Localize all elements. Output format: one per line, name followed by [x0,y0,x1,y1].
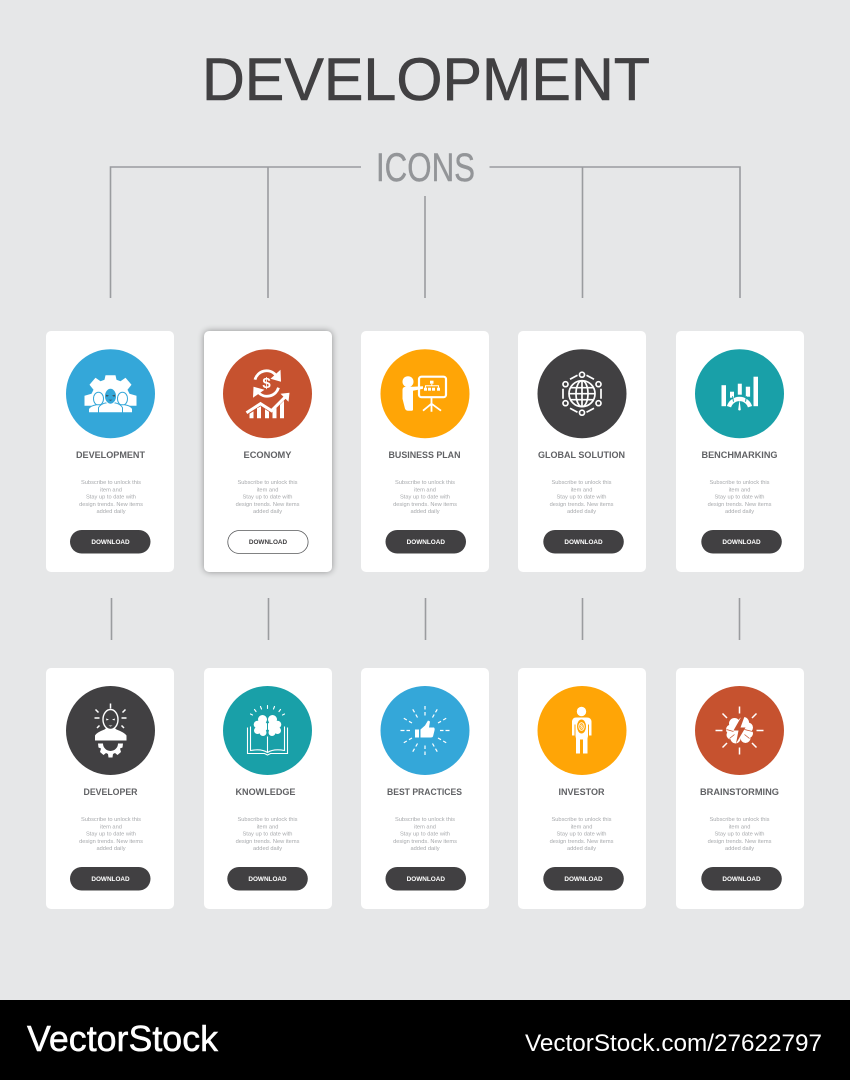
description: Stay up to date with [715,495,764,501]
description: Stay up to date with [243,495,292,501]
title: DEVELOPMENT [202,46,650,113]
description: Subscribe to unlock this [395,480,455,486]
description: item and [571,487,592,493]
icon: investor [538,686,626,775]
description [708,817,772,852]
description: Stay up to date with [86,495,136,501]
button [543,867,624,890]
panel: developer [46,668,174,909]
button [701,530,782,554]
panel: global solution [518,331,646,572]
button [227,867,308,890]
description: item and [414,487,436,493]
button: DOWNLOAD [407,876,445,883]
description: Subscribe to unlock this [237,480,298,486]
description: item and [257,824,278,830]
description: item and [729,487,750,493]
description: Stay up to date with [400,832,450,838]
description: item and [571,824,592,830]
description: item and [100,824,122,830]
icon: brainstorming [695,686,784,775]
description: design trends. New items [79,502,143,508]
description: added daily [96,846,126,852]
description [393,480,457,515]
description: Stay up to date with [557,495,606,501]
connector lines: middle [112,598,740,640]
button [386,530,466,554]
icon: development [66,349,155,438]
description [79,817,143,852]
description: Subscribe to unlock this [81,480,141,486]
panel: knowledge [204,668,332,909]
button: DOWNLOAD [249,539,288,546]
button [543,530,624,554]
heading: KNOWLEDGE [236,787,296,798]
heading: BEST PRACTICES [387,787,463,798]
button [70,530,150,554]
panel: investor [518,668,646,909]
button: DOWNLOAD [564,539,603,546]
button: DOWNLOAD [91,539,130,546]
description [393,817,457,852]
panel: economy [204,331,332,572]
description: added daily [96,509,126,515]
button: DOWNLOAD [407,539,445,546]
description: Subscribe to unlock this [709,480,770,486]
subtitle: ICONS: ICONS [376,146,475,190]
description: design trends. New items [550,839,614,845]
description [550,480,614,515]
icon: best practices [380,686,470,775]
button [228,530,308,554]
description [236,480,300,515]
footer logo: VectorStock [27,1018,219,1059]
description: design trends. New items [79,839,143,845]
button: DOWNLOAD [248,876,287,883]
button: DOWNLOAD [564,876,603,883]
icon: economy: $ [262,375,271,392]
heading: BRAINSTORMING [700,787,779,798]
panel: development [46,331,174,572]
description [550,817,614,852]
icon: benchmarking [695,349,784,438]
description: Stay up to date with [86,832,136,838]
button [70,867,150,890]
description: item and [414,824,436,830]
description: Subscribe to unlock this [551,817,612,823]
heading: BUSINESS PLAN [388,450,461,461]
icon: investor: $ [580,724,583,730]
description: Subscribe to unlock this [395,817,455,823]
description [79,480,143,515]
description: design trends. New items [393,839,457,845]
description: design trends. New items [236,502,300,508]
description: design trends. New items [708,502,772,508]
panel: brainstorming [676,668,804,909]
description: item and [257,487,278,493]
footer url: VectorStock.com/27622797 [525,1030,822,1057]
description: Subscribe to unlock this [81,817,141,823]
icon: business plan [380,349,470,438]
heading: BENCHMARKING [702,450,778,461]
description: added daily [253,509,282,515]
description: added daily [253,846,282,852]
description: Subscribe to unlock this [709,817,770,823]
heading: ECONOMY [244,450,292,461]
heading: DEVELOPMENT [76,450,145,461]
description [708,480,772,515]
panel: best practices [361,668,489,909]
description: Subscribe to unlock this [551,480,612,486]
description: added daily [725,509,754,515]
description: added daily [410,846,440,852]
description: Subscribe to unlock this [237,817,298,823]
icon: knowledge [223,686,312,775]
description: Stay up to date with [715,832,764,838]
heading: DEVELOPER [84,787,138,798]
description: design trends. New items [393,502,457,508]
icon: developer [66,686,155,775]
icon: global solution [538,349,626,438]
heading: GLOBAL SOLUTION [538,450,625,461]
description: added daily [567,509,596,515]
description: added daily [725,846,754,852]
icon: economy [223,349,312,438]
description: Stay up to date with [243,832,292,838]
heading: INVESTOR [558,787,605,798]
connector lines: top [110,167,740,298]
button: DOWNLOAD [91,876,130,883]
description: design trends. New items [708,839,772,845]
description: item and [729,824,750,830]
description: design trends. New items [236,839,300,845]
description: added daily [410,509,440,515]
button [701,867,782,890]
button: DOWNLOAD [722,876,761,883]
description: Stay up to date with [557,832,606,838]
description: added daily [567,846,596,852]
description: Stay up to date with [400,495,450,501]
description: item and [100,487,122,493]
panel: benchmarking [676,331,804,572]
button: DOWNLOAD [722,539,761,546]
panel: business plan [361,331,489,572]
description [236,817,300,852]
footer bar [0,1000,850,1080]
button [386,867,466,890]
description: design trends. New items [550,502,614,508]
